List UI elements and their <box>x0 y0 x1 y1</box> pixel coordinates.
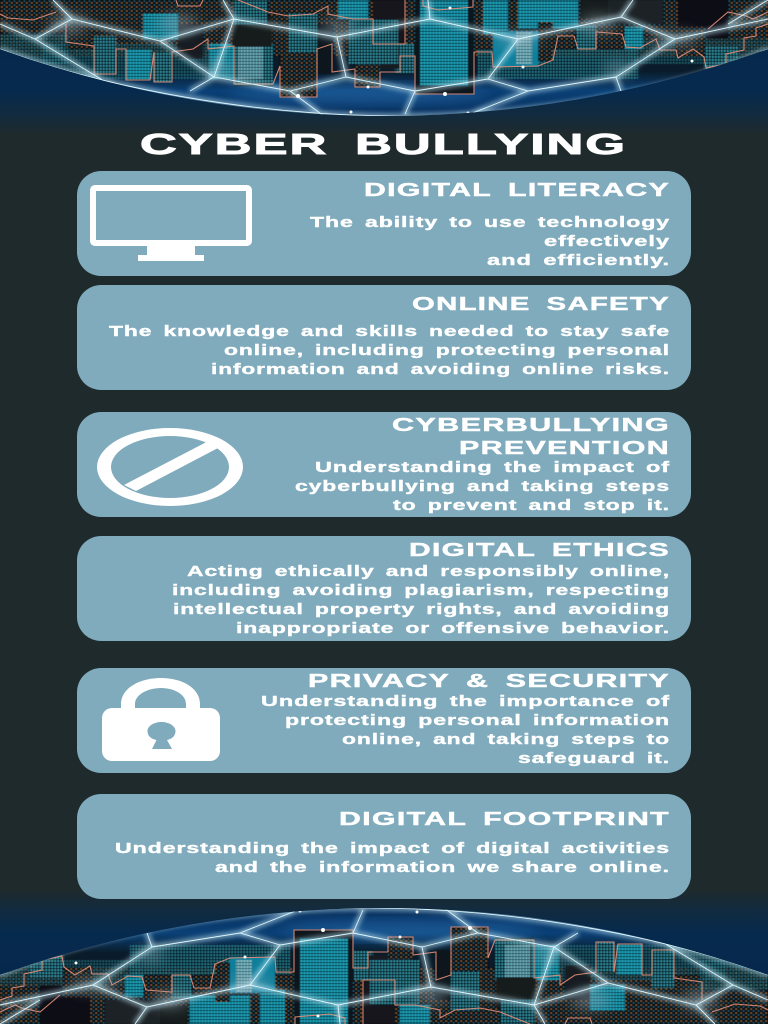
text: digital ethics description: Acting ethically and responsibly online, <box>187 563 670 580</box>
text: digital ethics description: intellectual property rights, and avoiding <box>173 601 670 618</box>
text: digital literacy description: and efficiently. <box>487 252 670 269</box>
text: cyberbullying prevention description: to prevent and stop it. <box>393 497 670 514</box>
heading: privacy and security: PRIVACY & SECURITY <box>308 671 670 691</box>
icon: computer monitor <box>93 188 249 261</box>
text: digital literacy description: The ability to use technology <box>310 214 670 231</box>
text: digital ethics description: inappropriate or offensive behavior. <box>236 620 670 637</box>
heading: digital ethics: DIGITAL ETHICS <box>409 540 670 560</box>
text: privacy and security description: Understanding the importance of <box>261 693 671 710</box>
heading: cyberbullying prevention <box>392 415 670 458</box>
panel: online safety <box>77 285 691 390</box>
text: cyberbullying prevention description <box>295 459 671 514</box>
title: CYBER BULLYING <box>140 129 627 161</box>
text: digital footprint description: and the information we share online. <box>215 859 670 876</box>
text: online safety description: The knowledge and skills needed to stay safe <box>109 323 670 340</box>
heading: digital footprint: DIGITAL FOOTPRINT <box>339 809 670 829</box>
icon: padlock <box>102 678 220 761</box>
text: online safety description <box>109 323 670 378</box>
text: privacy and security description <box>261 693 671 767</box>
text: cyberbullying prevention description: Understanding the impact of <box>315 459 671 476</box>
text: digital footprint description: Understanding the impact of digital activities <box>115 840 670 857</box>
panel: privacy and security <box>77 668 691 773</box>
text: privacy and security description: protecting personal information <box>285 712 670 729</box>
panel: digital literacy <box>77 171 691 276</box>
text: cyberbullying prevention description: cyberbullying and taking steps <box>295 478 670 495</box>
panel: cyberbullying prevention <box>77 412 691 517</box>
panel: digital footprint <box>77 794 691 899</box>
text: online safety description: information and avoiding online risks. <box>211 361 670 378</box>
text: digital literacy description: effectively <box>544 233 670 250</box>
text: online safety description: online, including protecting personal <box>224 342 670 359</box>
top city network image <box>0 0 768 134</box>
heading: online safety: ONLINE SAFETY <box>412 294 670 314</box>
text: privacy and security description: safeguard it. <box>518 750 670 767</box>
text: privacy and security description: online, and taking steps to <box>342 731 670 748</box>
text: digital ethics description: including avoiding plagiarism, respecting <box>172 582 670 599</box>
panel: digital ethics <box>77 536 691 641</box>
text: digital literacy description <box>310 214 670 269</box>
heading: digital literacy: DIGITAL LITERACY <box>364 180 670 200</box>
text: digital ethics description <box>172 563 670 637</box>
bottom city network image <box>0 890 768 1024</box>
heading: cyberbullying prevention: PREVENTION <box>459 438 670 458</box>
icon: prohibition sign <box>97 428 243 506</box>
text: digital footprint description <box>115 840 670 876</box>
heading: cyberbullying prevention: CYBERBULLYING <box>392 415 670 435</box>
